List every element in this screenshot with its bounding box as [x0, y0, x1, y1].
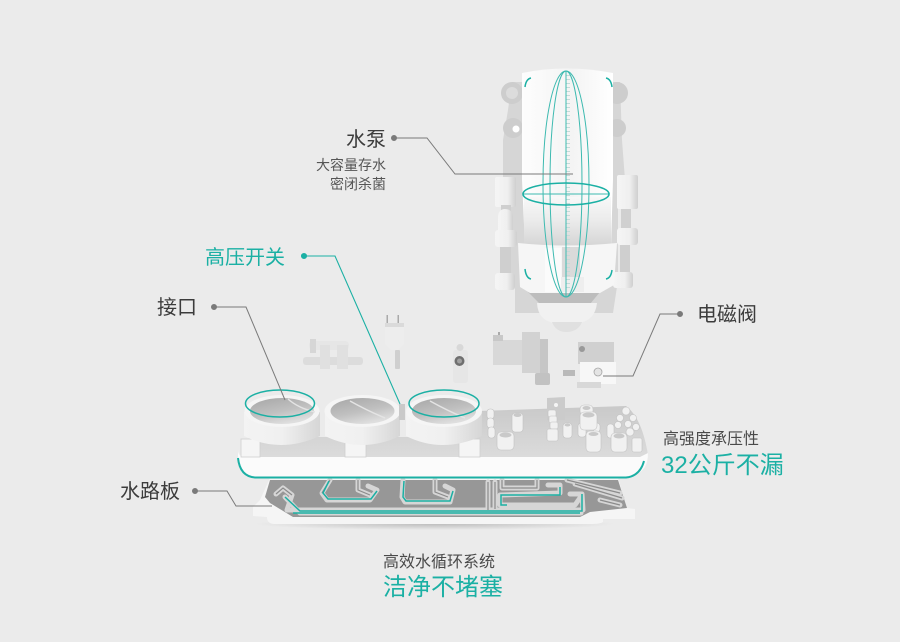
- leader: connector: [212, 304, 285, 400]
- tray tabs: [241, 439, 480, 457]
- text: high strength: 高强度承压性: [663, 430, 759, 448]
- corner brackets: [525, 78, 612, 279]
- text: sealed sterilization: 密闭杀菌: [330, 176, 386, 192]
- tray base: [238, 397, 648, 478]
- leader: water pump: [392, 136, 573, 174]
- teal wireframe ellipses: [523, 71, 609, 297]
- left tube: [495, 177, 517, 290]
- callout: 32 kg: 32公斤不漏: [661, 452, 784, 479]
- water pump: [495, 68, 638, 332]
- text: efficient water cycle: 高效水循环系统: [383, 553, 495, 571]
- right tube: [613, 175, 638, 288]
- leader: high pressure switch: [302, 254, 400, 404]
- pump motor dome: [528, 292, 600, 304]
- label: high pressure switch: 高压开关: [205, 246, 285, 269]
- tray back plate: [547, 397, 565, 420]
- leader: solenoid valve: [603, 312, 682, 376]
- label: water pump: 水泵: [346, 128, 386, 151]
- label: connector: 接口: [157, 296, 197, 319]
- part: left fitting: [303, 339, 363, 369]
- pump back plate: [503, 82, 625, 313]
- callout: clean: 洁净不堵塞: [383, 574, 503, 601]
- water circuit board: [253, 478, 635, 530]
- part: solenoid valve: [563, 342, 616, 388]
- text: large capacity: 大容量存水: [316, 157, 386, 173]
- part: high pressure switch: [385, 315, 404, 369]
- cups: [244, 390, 482, 445]
- scale: [566, 75, 570, 290]
- peg holes: [500, 406, 624, 438]
- label: solenoid valve: 电磁阀: [697, 303, 757, 326]
- pump collar: [518, 243, 617, 293]
- label: water circuit board: 水路板: [120, 480, 180, 503]
- part: elbow fitting: [453, 344, 468, 383]
- tray pegs: [487, 405, 642, 452]
- cylinder: [522, 68, 613, 247]
- part: solenoid left: [493, 332, 550, 385]
- leader: water circuit board: [192, 488, 272, 506]
